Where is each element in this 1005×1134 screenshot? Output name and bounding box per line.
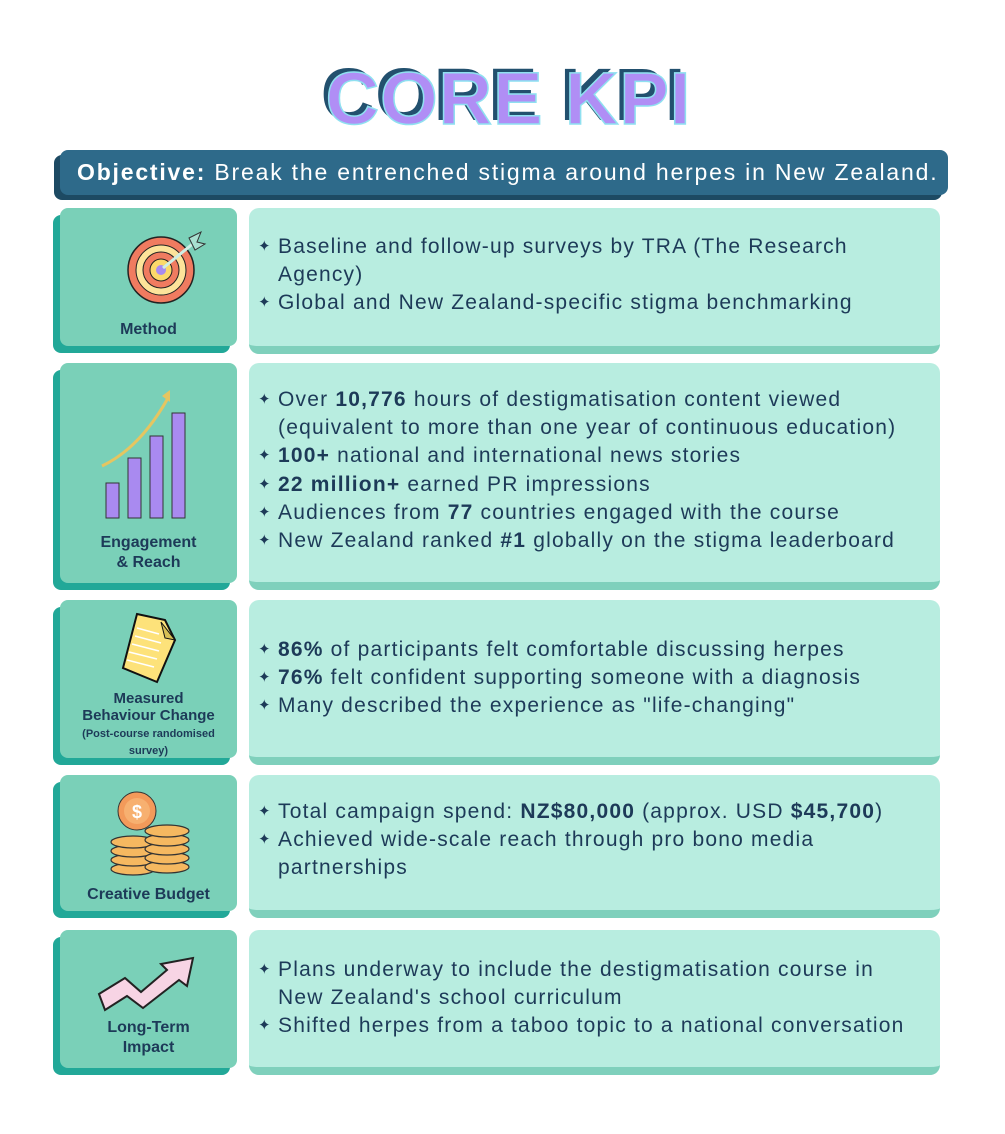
caption: Method — [120, 321, 177, 338]
caption: (Post-course randomised — [82, 728, 215, 740]
caption: Engagement — [100, 534, 196, 551]
panel: engagement text: Over 10,776 hours of destigmatisation content viewed — [278, 388, 841, 411]
panel: budget text — [249, 775, 940, 918]
panel: behaviour label — [60, 600, 237, 758]
caption — [82, 690, 215, 757]
caption: Behaviour Change — [82, 707, 215, 724]
icon: target — [127, 231, 206, 304]
icon: coins — [110, 792, 190, 876]
panel: engagement label — [60, 363, 237, 583]
caption: Measured — [113, 690, 184, 707]
panel: budget text: Total campaign spend: NZ$80,000 (approx. USD $45,700) — [278, 800, 883, 823]
panel: impact text — [249, 930, 940, 1075]
panel: engagement text: Audiences from 77 countries engaged with the course — [278, 501, 840, 524]
panel: impact text: New Zealand's school curriculum — [278, 986, 623, 1009]
panel: method text — [249, 208, 940, 354]
panel: impact text: Shifted herpes from a taboo topic to a national conversation — [278, 1014, 905, 1037]
panel: behaviour text: 86% of participants felt comfortable discussing herpes — [278, 638, 845, 661]
title: CORE KPI — [326, 57, 691, 140]
panel: behaviour text — [249, 600, 940, 765]
icon: coins: $ — [132, 802, 142, 822]
panel: engagement text: 22 million+ earned PR impressions — [278, 473, 651, 496]
panel: budget text: Achieved wide-scale reach through pro bono media — [278, 828, 814, 851]
panel: behaviour text: Many described the experience as "life-changing" — [278, 694, 795, 717]
panel: engagement text: New Zealand ranked #1 globally on the stigma leaderboard — [278, 529, 895, 552]
panel: impact text: Plans underway to include the destigmatisation course in — [278, 958, 874, 981]
panel: behaviour text: 76% felt confident supporting someone with a diagnosis — [278, 666, 861, 689]
panel: engagement text — [249, 363, 940, 590]
caption — [100, 534, 196, 571]
icon: zigzag arrow — [98, 956, 194, 1012]
icon: document — [122, 612, 176, 684]
panel: method text: Baseline and follow-up surveys by TRA (The Research — [278, 235, 848, 258]
caption — [107, 1019, 190, 1056]
caption: Impact — [123, 1039, 174, 1056]
caption: Creative Budget — [87, 886, 210, 903]
panel: method text: Global and New Zealand-specific stigma benchmarking — [278, 291, 853, 314]
panel: engagement text: (equivalent to more than one year of continuous education) — [278, 416, 896, 439]
panel: method label — [60, 208, 237, 346]
panel: engagement text: 100+ national and international news stories — [278, 444, 741, 467]
panel: budget label — [60, 775, 237, 911]
panel: impact label — [60, 930, 237, 1068]
caption: survey) — [129, 745, 168, 757]
caption: & Reach — [116, 554, 181, 571]
caption: Long-Term — [107, 1019, 190, 1036]
icon: bar chart growth — [101, 390, 186, 518]
panel: method text: Agency) — [278, 263, 363, 286]
objective banner — [60, 150, 948, 195]
objective banner: Objective: Break the entrenched stigma around herpes in New Zealand. — [77, 159, 938, 185]
panel: budget text: partnerships — [278, 856, 408, 879]
